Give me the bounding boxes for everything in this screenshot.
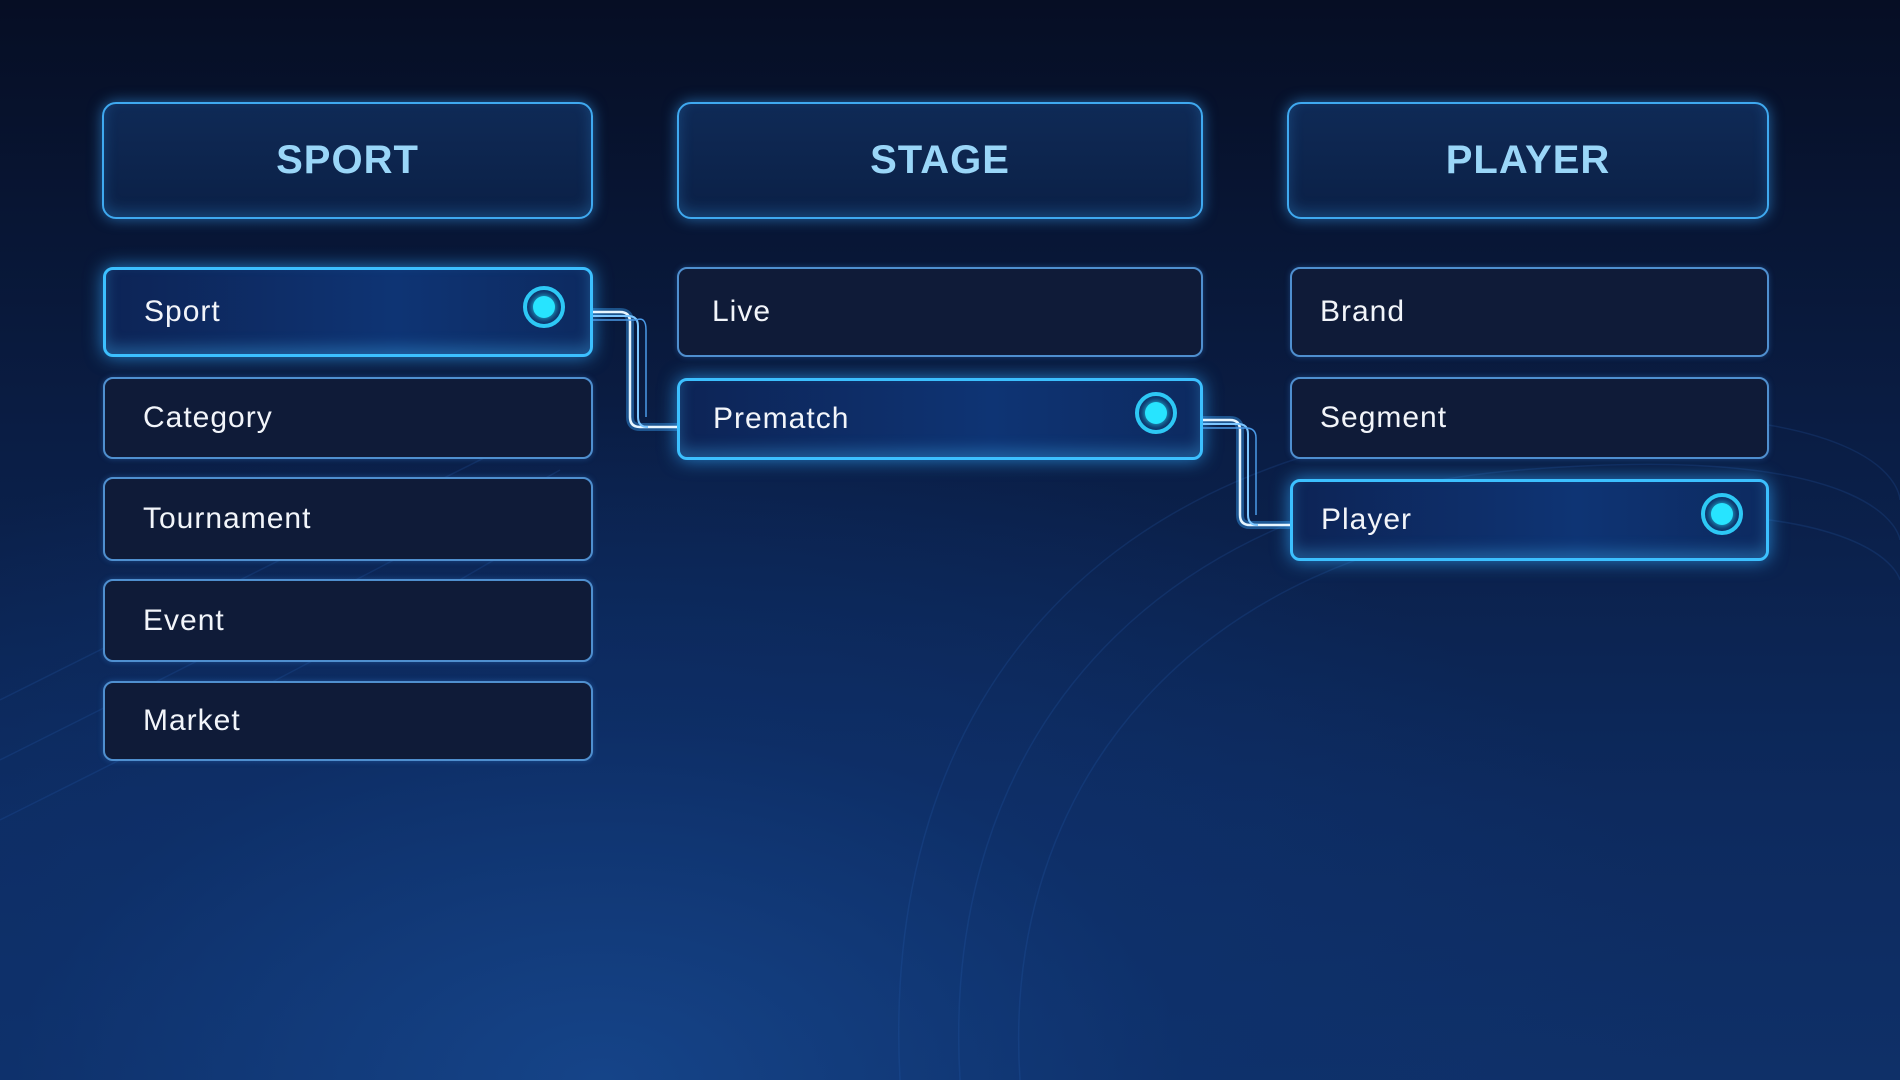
header: SPORT: SPORT — [276, 138, 419, 182]
row: Tournament: Tournament — [143, 502, 311, 535]
row: Live: Live — [712, 295, 771, 328]
row: Market — [103, 681, 593, 761]
connector: prematch to player — [1203, 420, 1290, 525]
row: Sport (active): Sport — [144, 295, 221, 328]
row: Event — [103, 579, 593, 662]
header: STAGE — [677, 102, 1203, 219]
row: Live — [677, 267, 1203, 357]
header: SPORT — [102, 102, 593, 219]
row: Category — [103, 377, 593, 459]
radio: player — [1701, 493, 1743, 535]
radio: sport — [523, 286, 565, 328]
header: PLAYER: PLAYER — [1446, 138, 1610, 182]
row: Sport (active) — [103, 267, 593, 357]
row: Brand — [1290, 267, 1769, 357]
row: Tournament — [103, 477, 593, 561]
connector: sport to prematch — [593, 312, 677, 427]
radio: prematch — [1135, 392, 1177, 434]
header: PLAYER — [1287, 102, 1769, 219]
row: Brand: Brand — [1320, 295, 1405, 328]
row: Prematch (active) — [677, 378, 1203, 460]
row: Player (active) — [1290, 479, 1769, 561]
row: Segment: Segment — [1320, 401, 1447, 434]
row: Player (active): Player — [1321, 503, 1412, 536]
row: Category: Category — [143, 401, 273, 434]
row: Event: Event — [143, 604, 225, 636]
row: Segment — [1290, 377, 1769, 459]
header: STAGE: STAGE — [870, 138, 1010, 182]
row: Market: Market — [143, 704, 241, 737]
row: Prematch (active): Prematch — [713, 402, 849, 435]
